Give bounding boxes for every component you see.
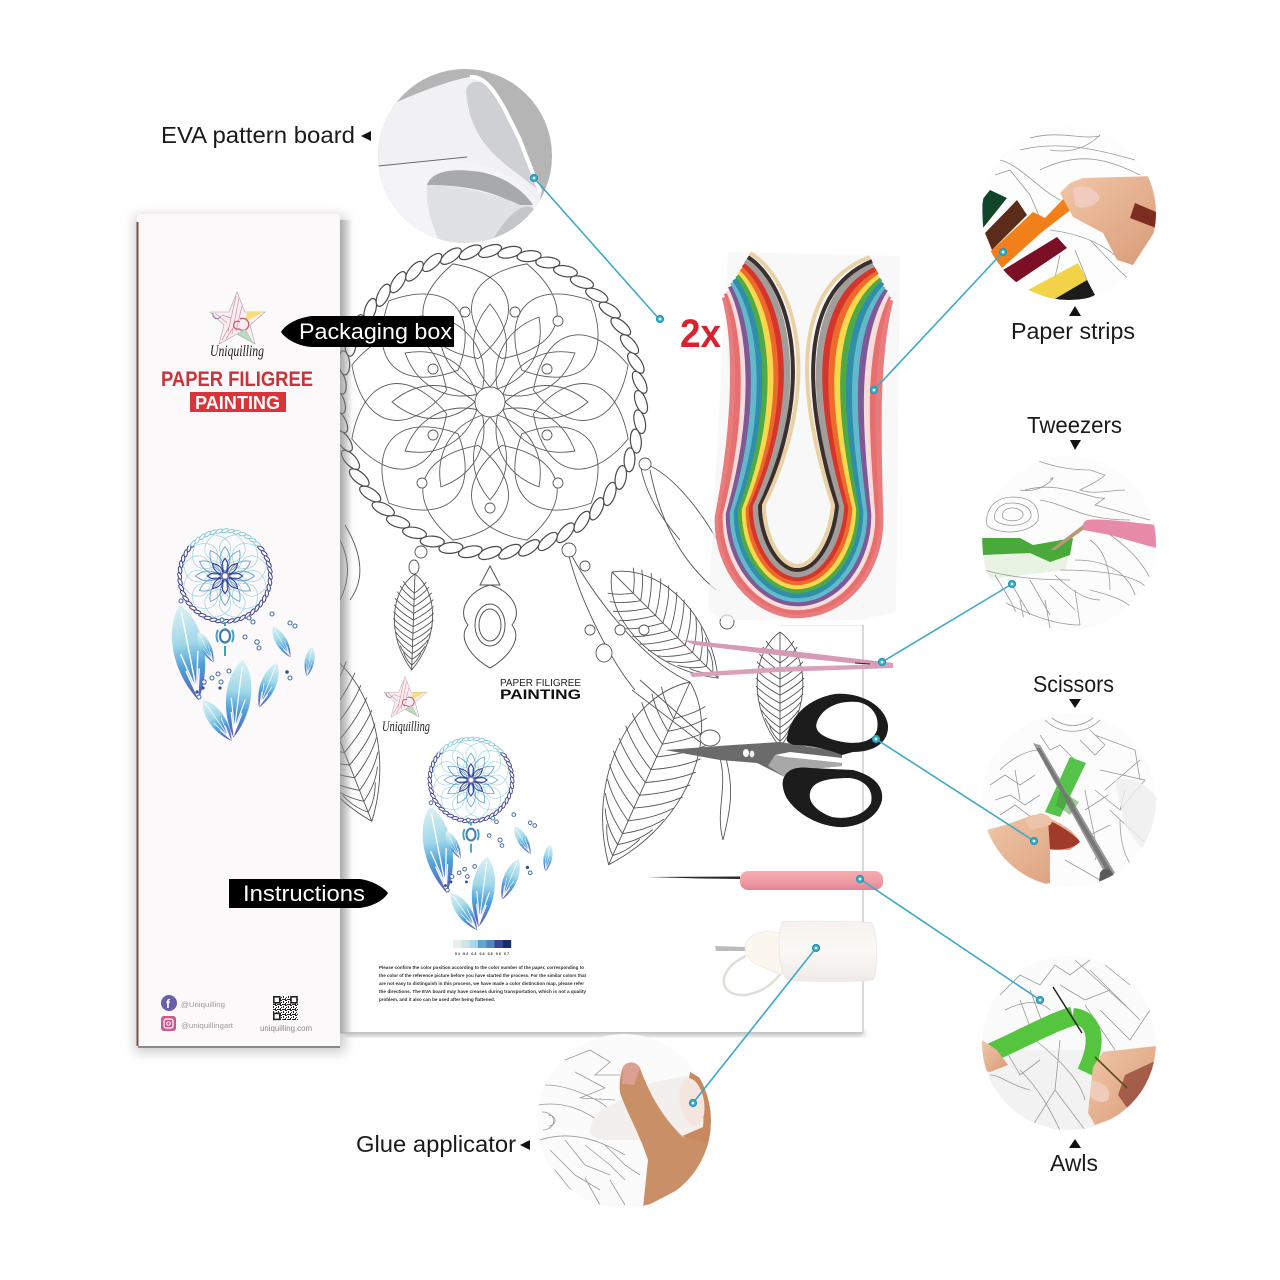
multiplier: 2x: 2x [680, 312, 721, 356]
QR code [260, 996, 312, 1033]
instruction sheet logo: Uniquilling [382, 719, 430, 735]
instructions paragraph: problem, and it also can be used after being flattened. [379, 997, 496, 1003]
label: Paper strips [1011, 306, 1135, 344]
color distinction bar [453, 940, 511, 956]
instruction sheet logo [382, 677, 430, 735]
scissors [665, 694, 888, 827]
instructions paragraph: are not easy to distinguish in this process, we have made a color distinction map, please refer [379, 981, 584, 987]
label: Scissors [1033, 671, 1114, 708]
paper strips bundle [708, 252, 900, 620]
strips [718, 253, 890, 615]
photo: tweezers [982, 456, 1156, 630]
photo: scissors [988, 718, 1156, 884]
big dreamcatcher line drawing [262, 226, 804, 882]
photo: awls [982, 956, 1157, 1130]
connector: scissors [873, 736, 1037, 844]
label: Glue applicator: Glue applicator [356, 1131, 516, 1157]
photo: EVA pattern board [378, 69, 552, 245]
instagram handle: @uniquillingart [181, 1021, 234, 1030]
box subtitle: PAINTING [195, 393, 280, 413]
label: Scissors: Scissors [1033, 671, 1114, 697]
instructions paragraph: Please confirm the color position according to the color number of the paper, corresponding to [379, 965, 584, 971]
label: Paper strips: Paper strips [1011, 318, 1135, 344]
connector: awls [857, 876, 1043, 1003]
facebook handle: f [166, 997, 171, 1011]
box title: PAPER FILIGREE [161, 368, 313, 391]
instructions paragraph: the directions. The EVA board may have creases during transportation, which is not a quality [379, 989, 586, 995]
label: EVA pattern board: EVA pattern board [161, 122, 355, 148]
photo: paper strips [982, 126, 1157, 302]
box dreamcatcher [165, 523, 317, 745]
glue bottle [715, 921, 877, 995]
facebook handle: @Uniquilling [181, 1000, 225, 1009]
label: Tweezers: Tweezers [1027, 412, 1122, 438]
web of the dreamcatcher [314, 226, 666, 578]
connector: glue applicator [690, 945, 819, 1106]
connector: tweezers [879, 581, 1015, 665]
color distinction bar: 01 02 03 04 05 06 07 [455, 952, 509, 956]
hanging feathers [262, 458, 804, 882]
label: Awls: Awls [1050, 1150, 1098, 1176]
box logo: Uniquilling [210, 343, 264, 360]
box logo [210, 292, 265, 360]
instagram handle [161, 1016, 234, 1031]
facebook handle [161, 995, 225, 1011]
QR code: uniquilling.com [260, 1024, 312, 1033]
label: Packaging box [281, 316, 454, 347]
instructions paragraph: the color of the reference picture before you have started the process. For the similar colors that [379, 973, 586, 979]
panel: EVA pattern board sheet [340, 200, 864, 1036]
instructions paragraph [379, 965, 586, 1003]
instruction sheet reference picture [416, 732, 554, 934]
connector: paper strips [871, 249, 1006, 393]
photo: glue applicator [537, 1034, 712, 1208]
label: Tweezers [1027, 412, 1122, 450]
instruction sheet heading: PAPER FILIGREE [500, 678, 581, 689]
label: Packaging box: Packaging box [299, 319, 453, 344]
label: Instructions: Instructions [243, 881, 365, 906]
panel: packaging box [135, 214, 352, 1052]
pendant ornament [464, 566, 516, 668]
tweezers [683, 640, 893, 677]
label: Instructions [229, 879, 388, 908]
awl [646, 871, 883, 890]
instruction sheet heading: PAINTING [500, 686, 581, 702]
plastic bag [708, 252, 900, 620]
instruction sheet heading [500, 678, 581, 702]
connector: EVA pattern board [531, 175, 663, 322]
